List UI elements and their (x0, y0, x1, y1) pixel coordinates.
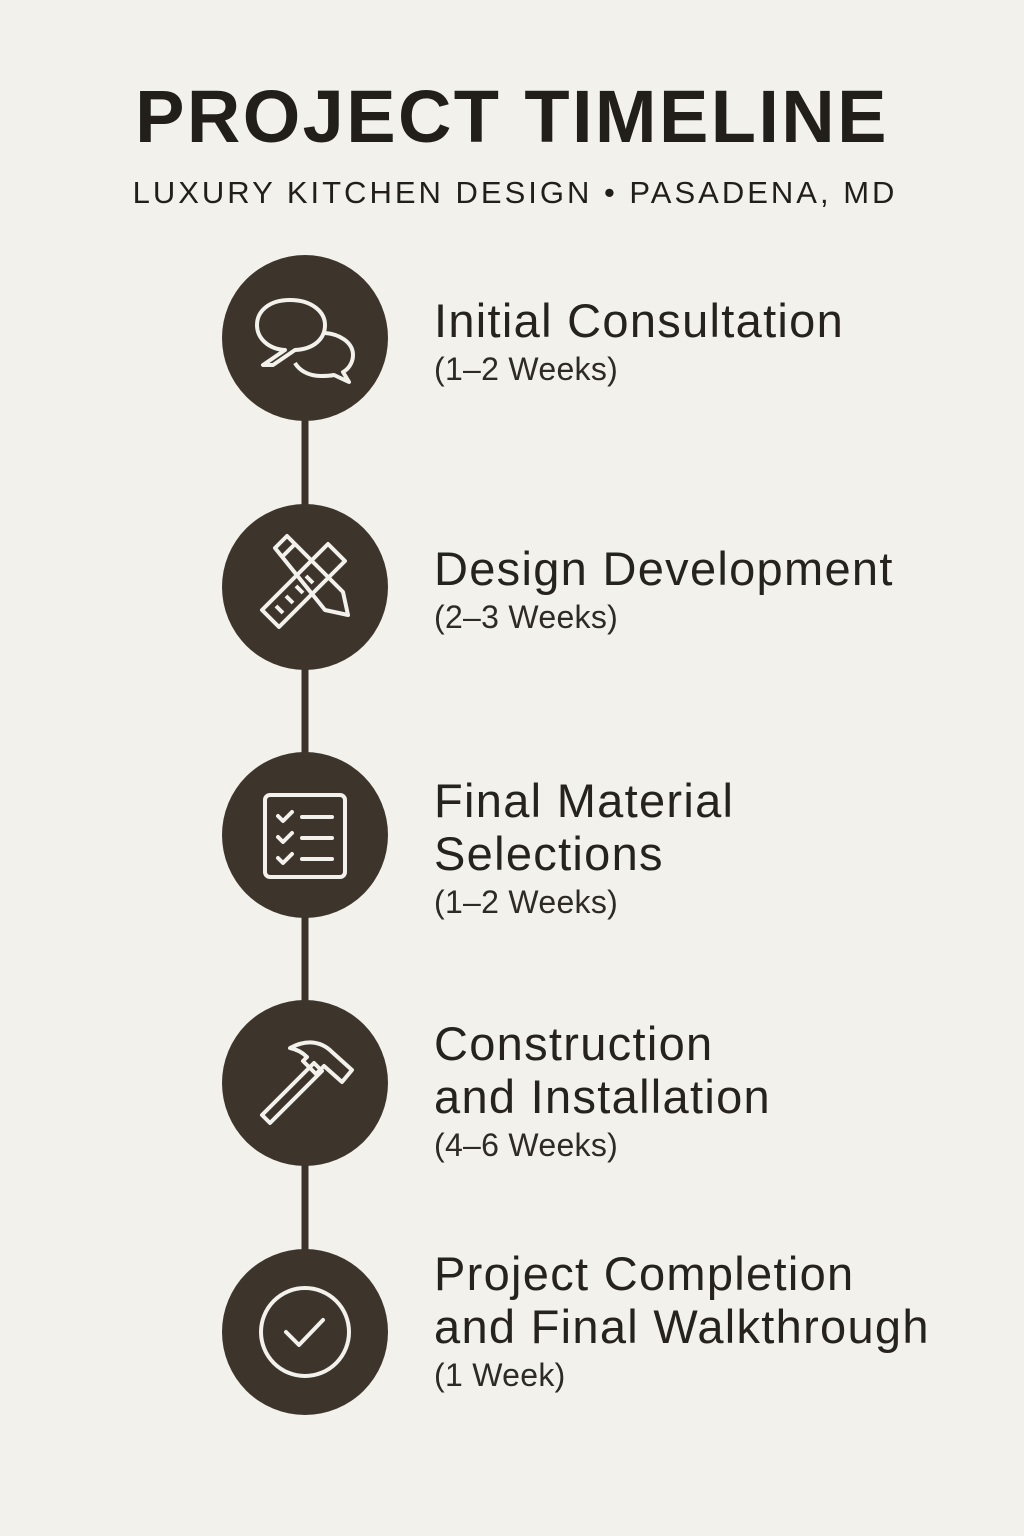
step 1 text: Initial Consultation (434, 294, 844, 347)
step 4 text: (4–6 Weeks) (434, 1127, 618, 1163)
step 3 text: Final Material (434, 774, 734, 827)
step 3 text: Selections (434, 827, 664, 880)
step 4 text (434, 1017, 771, 1163)
step 2 text: Design Development (434, 542, 894, 595)
icon: hammer (222, 1000, 388, 1166)
step 4 text: and Installation (434, 1070, 771, 1123)
step 5 text: (1 Week) (434, 1357, 566, 1393)
step 3 text: (1–2 Weeks) (434, 884, 618, 920)
icon: checklist (222, 752, 388, 918)
step 3 text (434, 774, 734, 920)
icon: checkmark circle (222, 1249, 388, 1415)
title: PROJECT TIMELINE (135, 75, 889, 158)
icon: pencil and ruler (222, 504, 388, 670)
step 5 text: Project Completion (434, 1247, 854, 1300)
icon: chat bubbles (222, 255, 388, 421)
step 2 text (434, 542, 894, 635)
step 1 text (434, 294, 844, 387)
step 2 text: (2–3 Weeks) (434, 599, 618, 635)
step 5 text (434, 1247, 930, 1393)
step 1 text: (1–2 Weeks) (434, 351, 618, 387)
step 4 text: Construction (434, 1017, 713, 1070)
subtitle: LUXURY KITCHEN DESIGN • PASADENA, MD (133, 175, 897, 210)
step 5 text: and Final Walkthrough (434, 1300, 930, 1353)
